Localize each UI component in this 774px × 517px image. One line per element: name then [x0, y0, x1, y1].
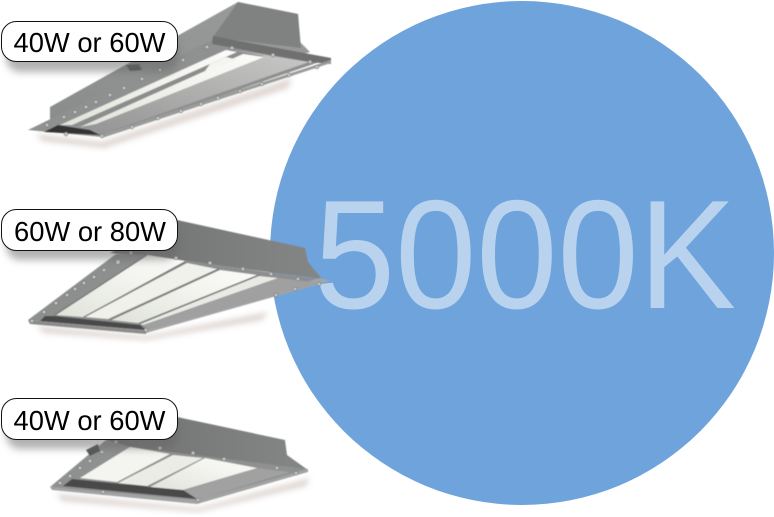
- bolts: [45, 45, 319, 138]
- dark inner strip: [40, 316, 146, 330]
- blue circle: [270, 1, 774, 505]
- light strips: [60, 50, 237, 125]
- light panels: [55, 255, 185, 317]
- fixture: bottom 40W or 60W: [50, 417, 310, 512]
- label: bottom wattage: [2, 398, 178, 449]
- label: middle wattage: [2, 210, 178, 260]
- front flange edge: [100, 60, 331, 138]
- panel dividers: [117, 454, 204, 487]
- reflector interior: [183, 468, 290, 500]
- connector: [126, 64, 142, 71]
- label: top wattage: [2, 22, 178, 72]
- housing: [110, 220, 322, 279]
- flange: [28, 40, 331, 137]
- connector: [86, 444, 100, 456]
- fixture: top 40W or 60W: [28, 2, 331, 148]
- back flange band: [212, 36, 331, 64]
- shadow: [36, 312, 268, 340]
- light panels: [80, 447, 170, 482]
- flange: [28, 254, 330, 331]
- bolts: [30, 251, 321, 332]
- housing: [50, 2, 310, 125]
- label: top wattage: 40W or 60W: [14, 27, 166, 58]
- reflector interior: [44, 49, 309, 134]
- dark inner strip: [44, 125, 100, 135]
- flange: [50, 440, 308, 502]
- label: bottom wattage: 40W or 60W: [14, 405, 166, 436]
- label: middle wattage: 60W or 80W: [14, 216, 167, 247]
- panel dividers: [55, 255, 259, 324]
- shadow: [36, 78, 292, 148]
- reflector interior: [143, 278, 320, 330]
- housing: [106, 417, 308, 470]
- bolts: [58, 440, 298, 502]
- dark inner strip: [63, 479, 197, 499]
- shadow: [56, 478, 310, 512]
- color temperature label: 5000K: [314, 168, 736, 341]
- fixture: middle 60W or 80W: [28, 220, 330, 340]
